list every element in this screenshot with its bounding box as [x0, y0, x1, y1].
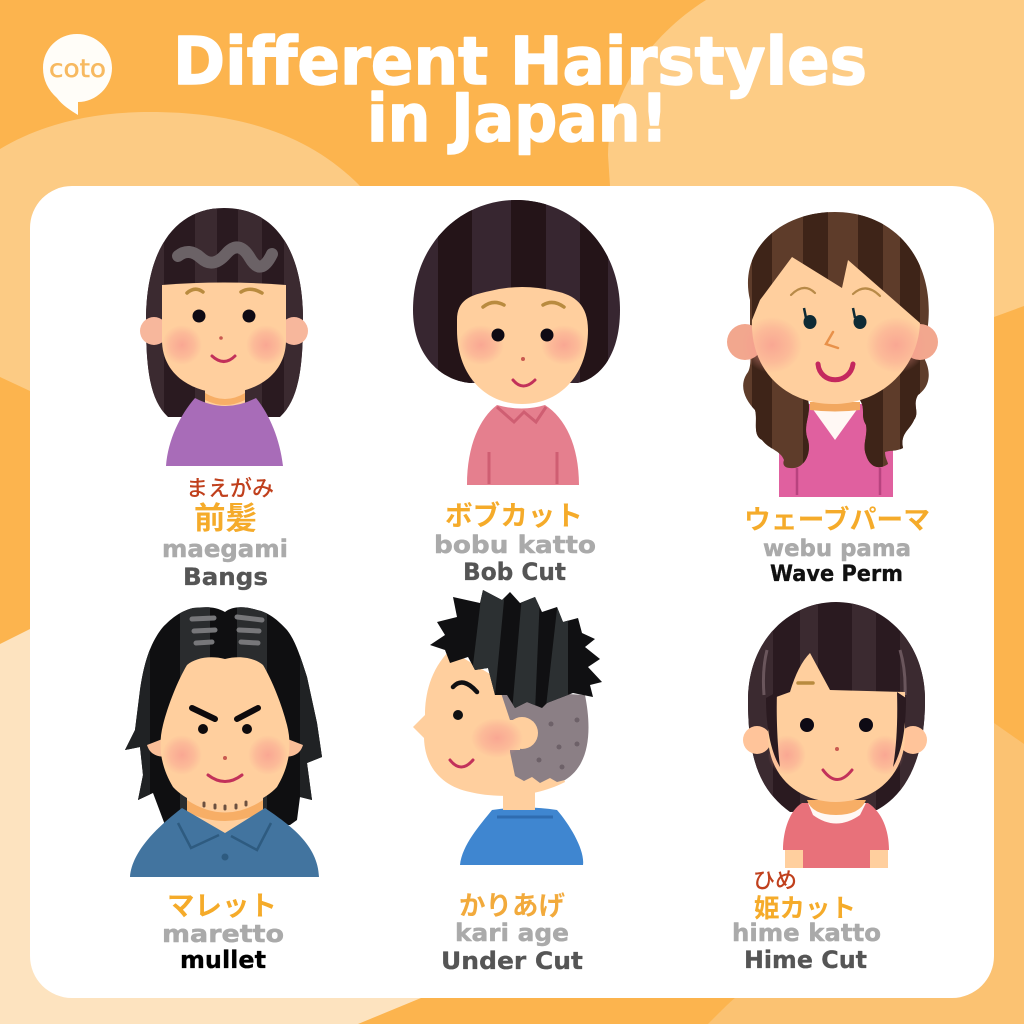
character: mullet	[118, 600, 330, 877]
title: in Japan!	[367, 80, 668, 157]
label: bob cut	[434, 500, 596, 586]
label: under cut: Under Cut	[441, 947, 583, 975]
label: mullet: maretto	[162, 920, 284, 948]
label: hime cut	[732, 868, 881, 974]
label: under cut: kari age	[455, 919, 569, 947]
label: wave perm: ウェーブパーマ	[744, 505, 930, 535]
character: hime cut	[743, 600, 930, 868]
label: wave perm	[744, 505, 930, 587]
label: wave perm: webu pama	[763, 536, 911, 562]
label: bob cut: Bob Cut	[463, 558, 566, 586]
label: hime cut: 姫カット	[754, 895, 856, 923]
label: mullet	[162, 890, 284, 974]
label: bob cut: bobu katto	[434, 531, 596, 559]
label: under cut: かりあげ	[459, 891, 565, 921]
title	[173, 23, 867, 157]
panel: white card	[30, 186, 994, 998]
character: under cut	[413, 585, 610, 865]
label: mullet: mullet	[180, 946, 266, 974]
label: under cut	[441, 891, 583, 975]
character: bob cut	[410, 195, 625, 485]
label: hime cut: Hime Cut	[744, 946, 867, 974]
label: bob cut: ボブカット	[445, 500, 583, 531]
logo: coto speech bubble	[43, 34, 112, 115]
logo: coto speech bubble: coto	[49, 54, 106, 83]
character: wave perm	[727, 205, 940, 497]
label: wave perm: Wave Perm	[770, 562, 903, 587]
title: Different Hairstyles	[173, 23, 867, 100]
label: mullet: マレット	[167, 890, 277, 921]
label: bangs	[162, 476, 288, 591]
label: hime cut: hime katto	[732, 919, 881, 947]
label: hime cut: ひめ	[753, 868, 797, 893]
character: bangs	[140, 200, 310, 466]
label: bangs: Bangs	[183, 563, 268, 591]
label: bangs: maegami	[162, 535, 288, 563]
label: bangs: まえがみ	[186, 476, 274, 501]
label: bangs: 前髪	[194, 501, 257, 536]
